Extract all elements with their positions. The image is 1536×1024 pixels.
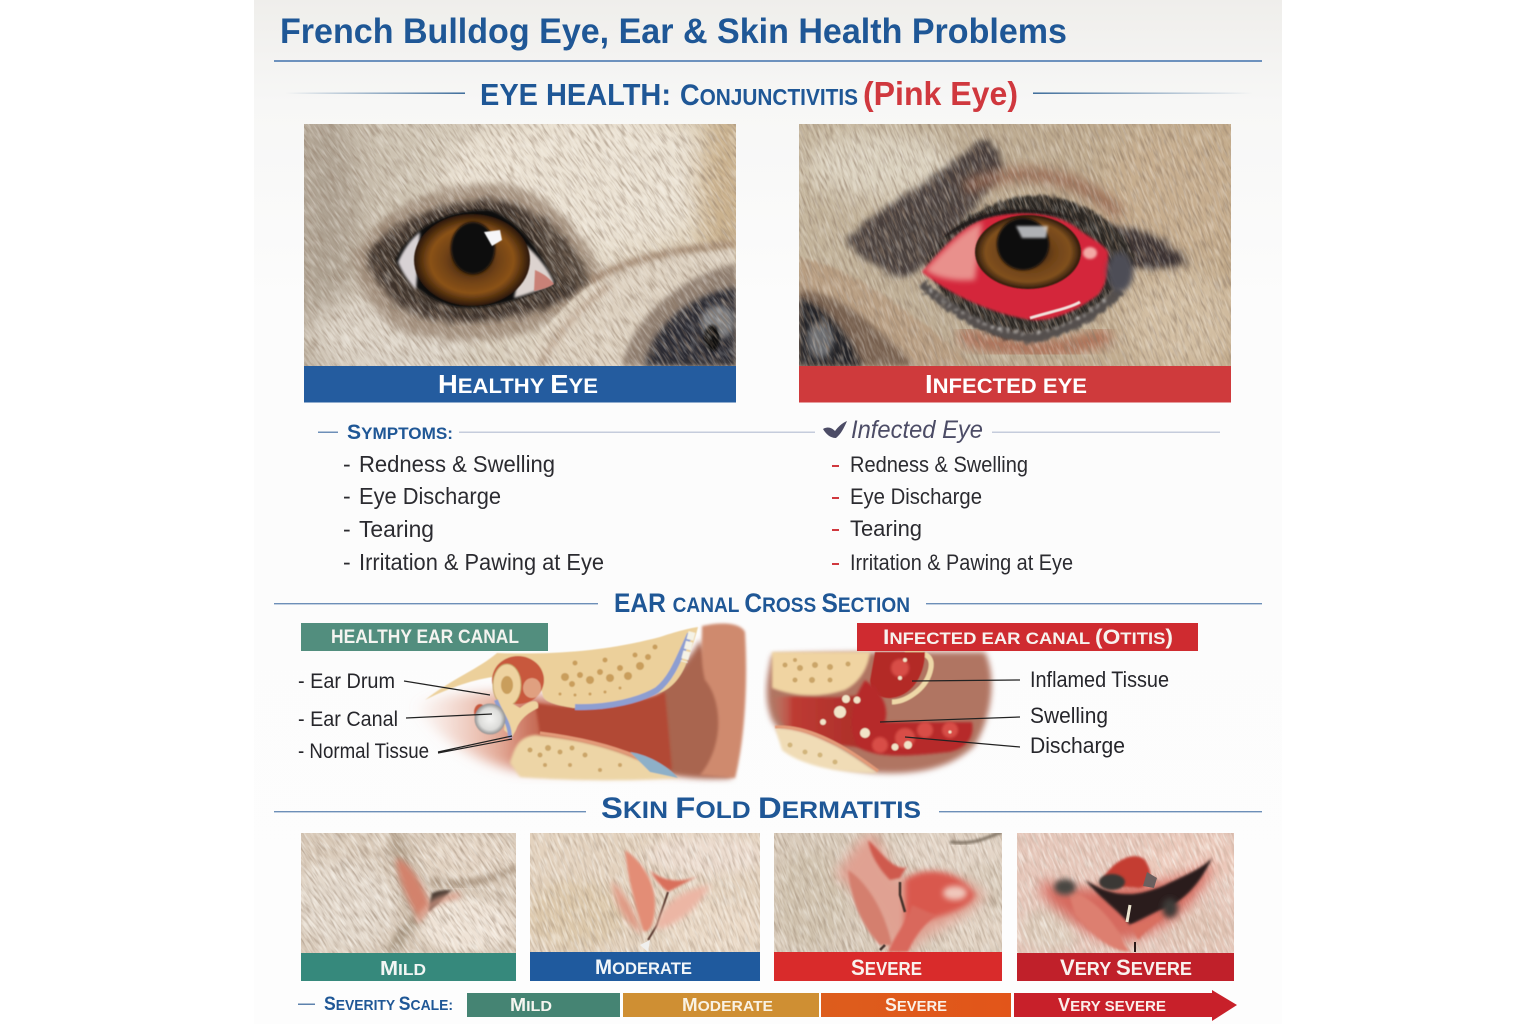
scale segment: very severe arrow: VERY SEVERE bbox=[1058, 995, 1166, 1015]
scale segment: moderate: MODERATE bbox=[682, 995, 773, 1015]
callouts: healthy ear labels: - Ear Drum bbox=[298, 670, 395, 693]
callouts: infected ear labels: Inflamed Tissue bbox=[1030, 667, 1169, 692]
callouts: healthy ear labels: - Normal Tissue bbox=[298, 740, 429, 763]
symptoms list: infected column: Infected Eye bbox=[851, 416, 983, 444]
photo card: severe bbox=[774, 832, 1010, 981]
photo card: mild bbox=[295, 833, 520, 981]
scale segment: mild bbox=[467, 993, 620, 1017]
symptoms list: healthy column: - bbox=[343, 549, 351, 575]
tag: infected ear canal: INFECTED EAR CANAL (OTITIS) bbox=[883, 626, 1173, 649]
symptoms list: healthy column: - bbox=[343, 516, 351, 542]
label: healthy eye bbox=[304, 366, 736, 402]
symptoms list: healthy column: Tearing bbox=[359, 516, 434, 542]
symptoms list: healthy column: Irritation & Pawing at Eye bbox=[359, 549, 604, 575]
title: French Bulldog Eye, Ear & Skin Health Problems bbox=[280, 12, 1067, 51]
heading: ear canal cross section: EAR CANAL CROSS SECTION bbox=[614, 588, 910, 618]
callouts: infected ear labels: Swelling bbox=[1030, 703, 1108, 728]
scale segment: very severe arrow bbox=[1014, 990, 1237, 1021]
symptoms list: healthy column: - bbox=[343, 451, 351, 477]
heading: eye health: (Pink Eye) bbox=[863, 75, 1018, 112]
photo card: very severe: VERY SEVERE bbox=[1060, 955, 1192, 980]
heading: eye health: EYE HEALTH: bbox=[480, 77, 671, 112]
tag: healthy ear canal bbox=[301, 623, 548, 651]
symptoms list: infected column: Eye Discharge bbox=[850, 484, 982, 509]
panel: healthy eye photo bbox=[304, 124, 736, 366]
symptoms list: infected column: Tearing bbox=[850, 516, 922, 541]
severity scale label: SEVERITY SCALE: bbox=[324, 994, 453, 1015]
symptoms list: healthy column bbox=[318, 421, 815, 575]
photo card: severe: SEVERE bbox=[851, 955, 922, 980]
symptoms list: healthy column: SYMPTOMS: bbox=[347, 421, 453, 444]
photo card: moderate: MODERATE bbox=[595, 956, 692, 979]
symptoms list: infected column: Irritation & Pawing at Eye bbox=[850, 550, 1073, 575]
callouts: infected ear labels bbox=[880, 667, 1169, 758]
label: healthy eye: HEALTHY EYE bbox=[438, 369, 598, 399]
symptoms list: infected column bbox=[823, 416, 1220, 575]
symptoms list: healthy column: Redness & Swelling bbox=[359, 451, 555, 477]
callouts: healthy ear labels: - Ear Canal bbox=[298, 708, 398, 731]
photo card: moderate bbox=[525, 833, 765, 981]
photo card: mild: MILD bbox=[380, 958, 426, 980]
heading: eye health bbox=[285, 75, 1253, 112]
symptoms list: healthy column: - bbox=[343, 483, 351, 509]
scale segment: severe: SEVERE bbox=[885, 995, 947, 1015]
photo card: very severe bbox=[1017, 833, 1240, 981]
infographic bbox=[254, 0, 1282, 1021]
icon: check mark bbox=[823, 421, 847, 438]
heading: skin fold dermatitis: SKIN FOLD DERMATITIS bbox=[601, 792, 921, 825]
heading: eye health: CONJUNCTIVITIS bbox=[680, 79, 858, 112]
symptoms list: healthy column: Eye Discharge bbox=[359, 483, 501, 509]
scale segment: mild: MILD bbox=[510, 995, 552, 1015]
label: infected eye: INFECTED EYE bbox=[925, 369, 1087, 399]
scale segment: moderate bbox=[623, 993, 819, 1017]
symptoms list: infected column: Redness & Swelling bbox=[850, 452, 1028, 477]
severity scale bar bbox=[467, 990, 1237, 1021]
tag: healthy ear canal: HEALTHY EAR CANAL bbox=[331, 627, 519, 648]
illustration: infected ear canal bbox=[767, 652, 992, 773]
callouts: healthy ear labels bbox=[298, 670, 512, 763]
label: infected eye bbox=[799, 366, 1231, 402]
scale segment: severe bbox=[821, 993, 1011, 1017]
illustration: healthy ear canal bbox=[412, 624, 746, 780]
tag: infected ear canal bbox=[857, 623, 1198, 651]
callouts: infected ear labels: Discharge bbox=[1030, 733, 1125, 758]
panel: infected eye photo bbox=[799, 124, 1240, 370]
